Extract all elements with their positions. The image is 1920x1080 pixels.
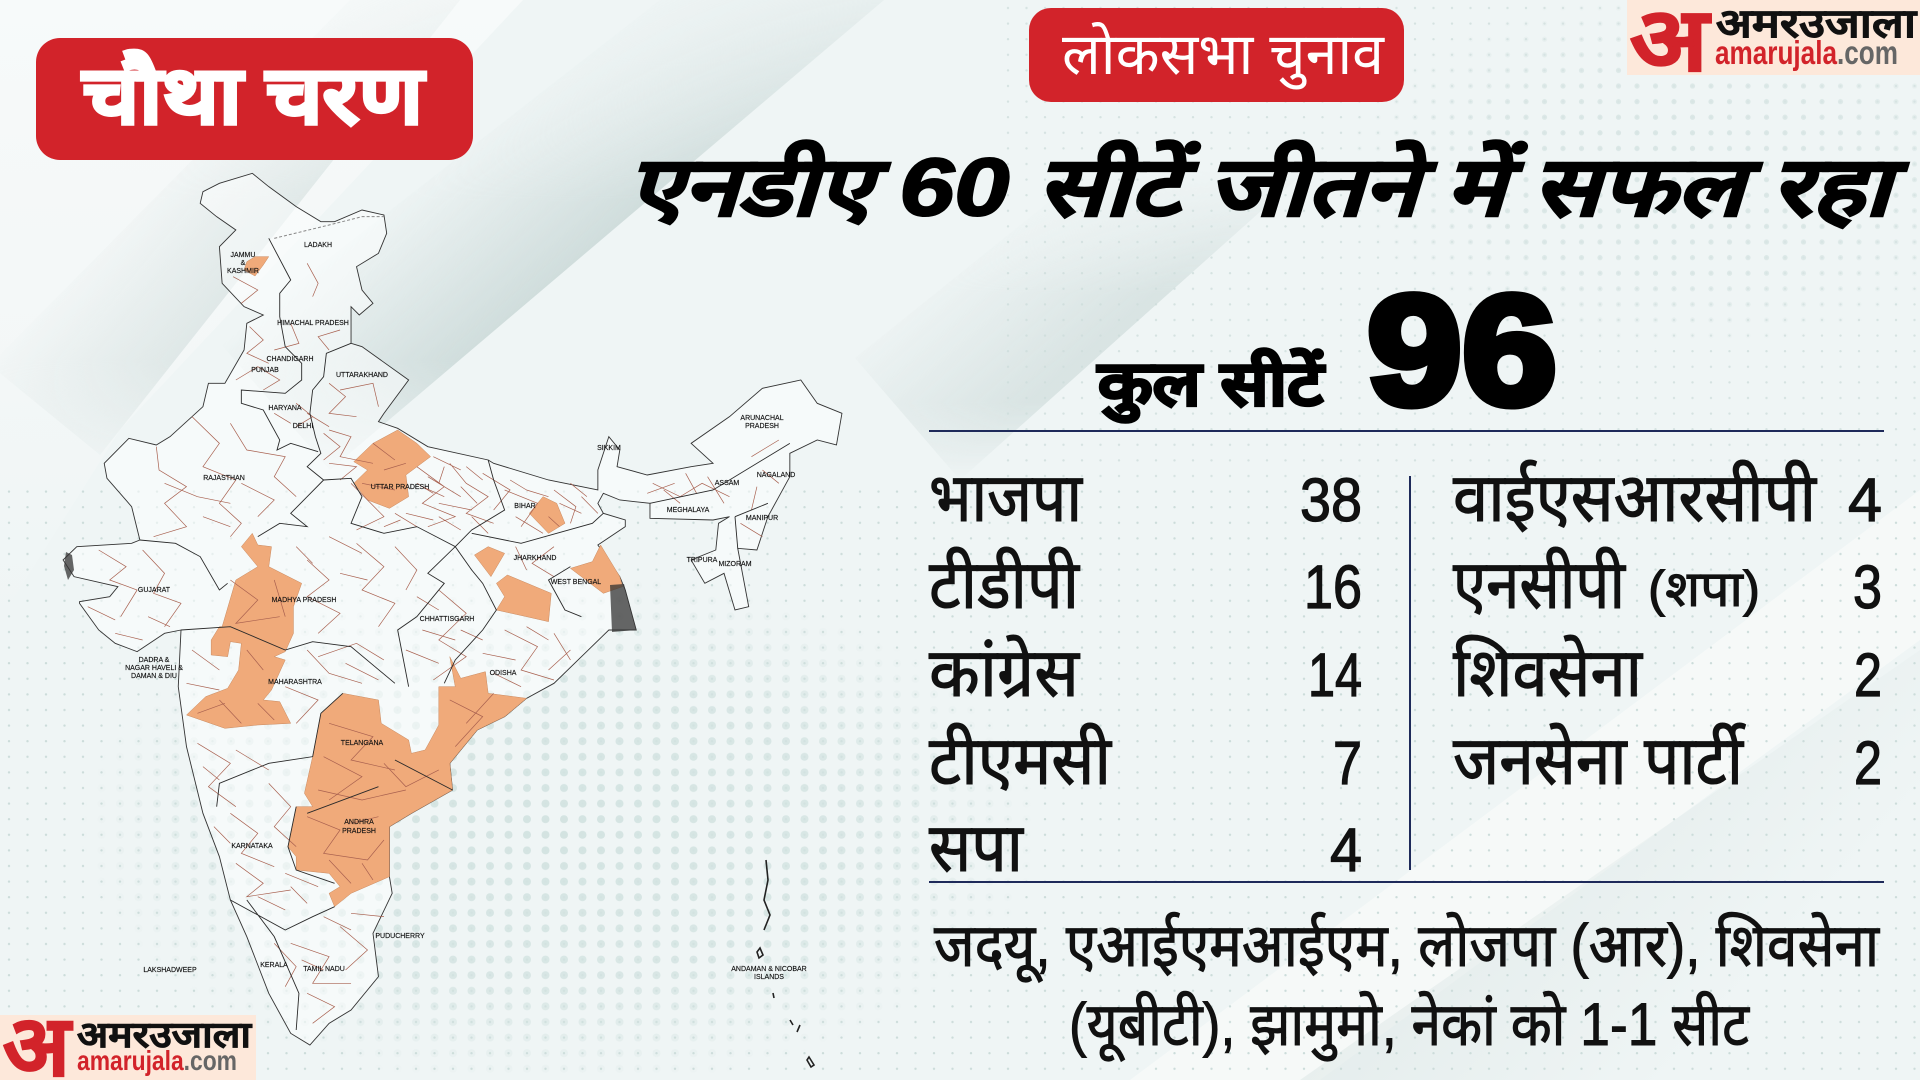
highlighted constituencies in orange: [186, 257, 623, 907]
party table left column: 14: [1308, 641, 1362, 709]
state labels: NAGALAND: [757, 472, 795, 479]
state labels: SIKKIM: [597, 445, 621, 452]
state labels: CHHATTISGARH: [420, 616, 474, 623]
footer note: (यूबीटी), झामुमो, नेकां को 1-1 सीट: [1069, 991, 1751, 1062]
state labels: HIMACHAL PRADESH: [277, 320, 349, 327]
party table right column: (शपा): [1648, 561, 1760, 617]
state labels: JAMMU: [231, 252, 255, 259]
state labels: DAMAN & DIU: [131, 673, 177, 680]
state labels: CHANDIGARH: [266, 356, 314, 363]
party table right column: 3: [1853, 553, 1882, 621]
party table left column: 38: [1300, 466, 1362, 534]
state labels: MADHYA PRADESH: [272, 597, 336, 604]
state labels: JHARKHAND: [514, 555, 556, 562]
state labels: KASHMIR: [227, 268, 259, 275]
state labels: UTTAR PRADESH: [371, 484, 429, 491]
party table right column: [1453, 460, 1882, 799]
state labels: PUDUCHERRY: [375, 933, 425, 940]
state labels: NAGAR HAVELI &: [125, 665, 183, 672]
logo bottom left: अमरउजाला: [77, 1014, 253, 1055]
state labels: MANIPUR: [746, 515, 778, 522]
party table left column: भाजपा: [929, 460, 1083, 536]
party table left column: कांग्रेस: [929, 635, 1080, 711]
footer note: [934, 912, 1880, 1062]
top rule: [929, 430, 1884, 432]
logo top right: अमरउजाला: [1716, 2, 1918, 46]
state labels: TELANGANA: [341, 740, 384, 747]
column rule: [1409, 476, 1411, 870]
state labels: [125, 242, 807, 981]
andaman and nicobar islands: [757, 860, 814, 1067]
constituency boundaries: [88, 263, 779, 1023]
state labels: LADAKH: [304, 242, 332, 249]
state labels: ODISHA: [490, 670, 517, 677]
state labels: DELHI: [293, 423, 313, 430]
state labels: LAKSHADWEEP: [143, 967, 197, 974]
state boundaries: [140, 217, 790, 1030]
state labels: WEST BENGAL: [551, 579, 601, 586]
total seats: [1097, 264, 1557, 438]
party table right column: एनसीपी: [1453, 547, 1626, 623]
party table left column: टीएमसी: [929, 723, 1112, 799]
logo top right: amarujala.com: [1715, 34, 1898, 71]
state labels: ANDAMAN & NICOBAR: [731, 966, 807, 973]
state labels: HARYANA: [268, 405, 302, 412]
state labels: ASSAM: [715, 480, 739, 487]
party table left column: 7: [1333, 729, 1362, 797]
sundarbans delta and coast detail: [64, 552, 636, 632]
state labels: PUNJAB: [251, 367, 279, 374]
state labels: GUJARAT: [138, 587, 171, 594]
party table left column: टीडीपी: [929, 547, 1080, 623]
party table right column: जनसेना पार्टी: [1453, 723, 1746, 799]
state labels: TAMIL NADU: [303, 966, 345, 973]
state labels: MEGHALAYA: [667, 507, 710, 514]
logo top right: [1627, 0, 1920, 89]
state labels: ARUNACHAL: [740, 415, 784, 422]
state labels: PRADESH: [342, 828, 376, 835]
party table right column: 4: [1848, 466, 1882, 534]
total seats: 96: [1367, 264, 1557, 438]
state labels: DADRA &: [139, 657, 170, 664]
state labels: MAHARASHTRA: [268, 679, 322, 686]
party table right column: 2: [1854, 641, 1882, 709]
party table right column: शिवसेना: [1453, 635, 1643, 711]
party table right column: वाईएसआरसीपी: [1453, 460, 1817, 536]
badge: Lok Sabha election: [1029, 8, 1404, 102]
headline: एनडीए 60 सीटें जीतने में सफल रहा: [628, 140, 1909, 233]
badge: phase 4: चौथा चरण: [81, 50, 426, 140]
logo bottom left: [0, 999, 256, 1080]
state labels: RAJASTHAN: [203, 475, 245, 482]
state labels: PRADESH: [745, 423, 779, 430]
state labels: UTTARAKHAND: [336, 372, 388, 379]
state labels: TRIPURA: [687, 557, 718, 564]
party table left column: [929, 460, 1362, 886]
total seats: कुल सीटें: [1097, 348, 1326, 423]
map outline fill and border: [63, 173, 842, 1045]
bottom rule: [929, 881, 1884, 883]
state labels: MIZORAM: [718, 561, 752, 568]
badge: phase 4: [36, 38, 473, 160]
map of India with constituencies: [63, 173, 842, 1067]
state labels: ANDHRA: [344, 819, 374, 826]
party table left column: 16: [1304, 553, 1362, 621]
state labels: KERALA: [260, 962, 288, 969]
party table left column: 4: [1330, 816, 1362, 884]
party table right column: 2: [1854, 729, 1882, 797]
state labels: BIHAR: [514, 503, 536, 510]
party table left column: सपा: [929, 810, 1024, 886]
state labels: KARNATAKA: [231, 843, 273, 850]
state labels: &: [241, 260, 246, 267]
logo bottom left: amarujala.com: [77, 1045, 237, 1076]
state labels: ISLANDS: [754, 974, 784, 981]
badge: Lok Sabha election: लोकसभा चुनाव: [1062, 22, 1386, 90]
